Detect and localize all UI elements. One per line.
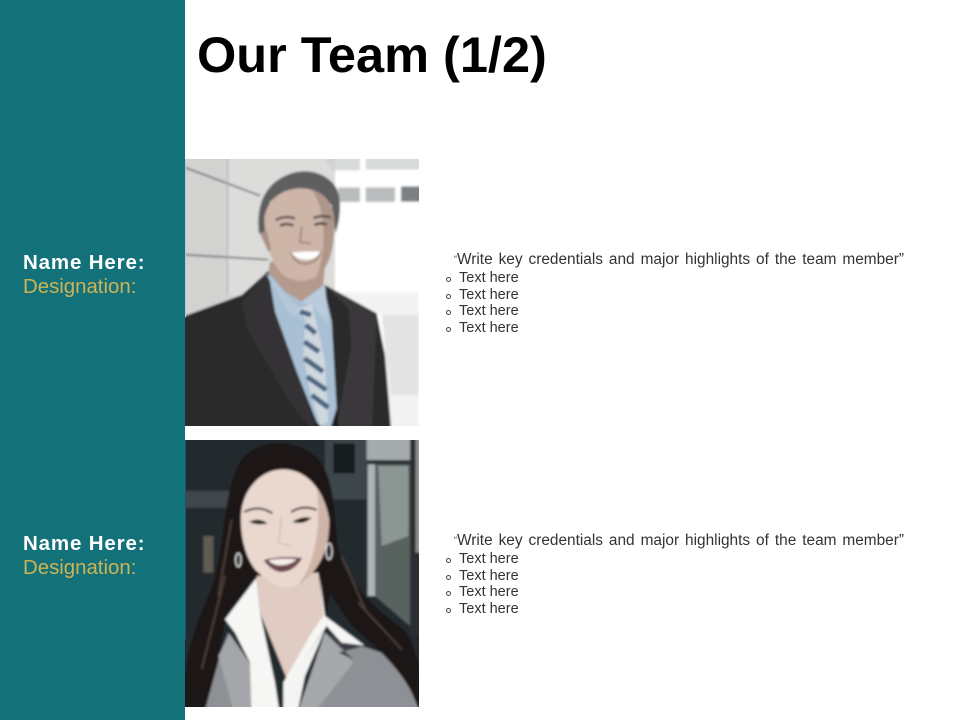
bio text: second team member: Text here bbox=[459, 551, 519, 567]
brows and eyes bbox=[276, 216, 331, 220]
face bbox=[241, 469, 329, 587]
title: Our Team (1/2) bbox=[197, 26, 547, 83]
hair right strand bbox=[325, 496, 422, 716]
bio text: second team member: “Write key credentials and major highlights of the team member” bbox=[454, 532, 904, 549]
photo: woman in gray blazer bbox=[185, 440, 419, 707]
photo: man in dark suit bbox=[185, 159, 419, 426]
name block: second team member bbox=[23, 532, 145, 579]
bio text: second team member: Text here bbox=[459, 601, 519, 617]
suit bbox=[178, 271, 392, 435]
shirt bbox=[225, 578, 280, 716]
blazer bbox=[203, 633, 428, 716]
bio text: first team member: Text here bbox=[459, 320, 519, 336]
bio text: first team member: Text here bbox=[459, 287, 519, 303]
bio text: second team member: Text here bbox=[459, 568, 519, 584]
name block: first team member: Designation: bbox=[23, 276, 136, 298]
brows and eyes bbox=[244, 508, 317, 513]
name block: first team member: Name Here: bbox=[23, 251, 145, 274]
face bbox=[264, 188, 334, 281]
tie bbox=[297, 304, 328, 426]
earrings bbox=[236, 553, 241, 567]
neck bbox=[268, 262, 325, 302]
bio text: first team member: Text here bbox=[459, 270, 519, 286]
hair bbox=[258, 171, 340, 233]
name block: second team member: Designation: bbox=[23, 557, 136, 579]
bio text: second team member: Text here bbox=[459, 584, 519, 600]
smile bbox=[264, 557, 302, 572]
smile bbox=[291, 251, 321, 260]
bio text: first team member: Text here bbox=[459, 303, 519, 319]
bio text: first team member bbox=[446, 251, 904, 336]
bio text: second team member bbox=[446, 532, 904, 617]
neck bbox=[257, 573, 325, 683]
shirt bbox=[268, 272, 337, 435]
name block: second team member: Name Here: bbox=[23, 532, 145, 555]
name block: first team member bbox=[23, 251, 145, 298]
hair back bbox=[182, 443, 338, 716]
left teal sidebar bbox=[0, 0, 185, 720]
bio text: first team member: “Write key credentials and major highlights of the team member” bbox=[454, 251, 904, 268]
